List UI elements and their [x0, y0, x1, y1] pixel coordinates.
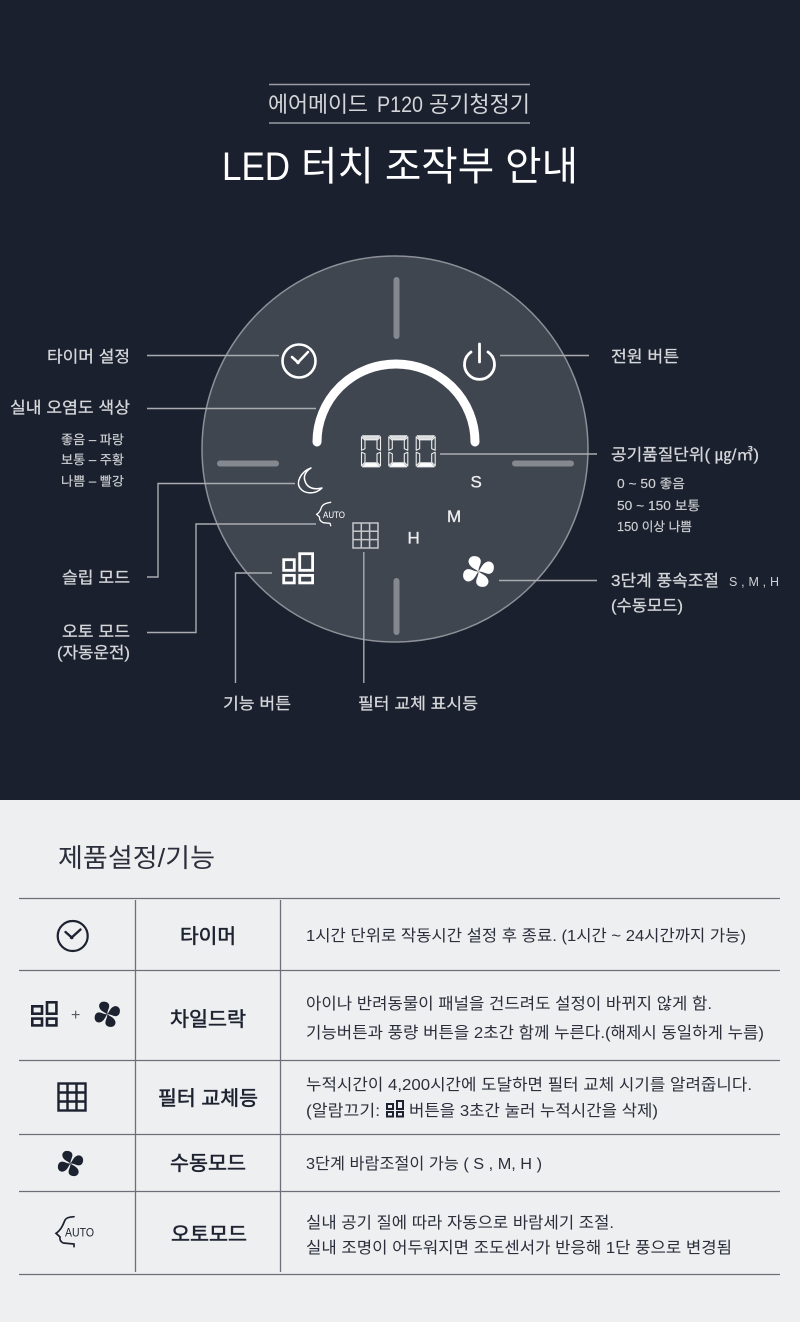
row: timer: 타이머 [180, 925, 236, 948]
text: colour legend: 좋음 – 파랑 [61, 433, 125, 447]
text: colour legend: 나쁨 – 빨강 [61, 474, 125, 488]
icon: function squares [32, 1002, 56, 1025]
icon: sleep moon [298, 468, 322, 493]
row: auto mode [56, 1214, 732, 1257]
text: air quality ranges: 50 ~ 150 보통 [617, 499, 700, 513]
row: auto mode: 실내 조명이 어두워지면 조도센서가 반응해 1단 풍으로 변경됨 [306, 1239, 732, 1257]
title: 터치 조작부 안내 [301, 145, 578, 189]
air quality arc [317, 364, 475, 442]
fan speed letters [408, 472, 482, 548]
icon: fan [93, 1000, 121, 1028]
callout: auto mode: (자동운전) [57, 644, 130, 662]
icon: auto mode [317, 502, 345, 526]
row: manual mode: 수동모드 [170, 1153, 246, 1175]
icon: function squares [284, 554, 313, 583]
tick marks [217, 277, 574, 635]
digit 3 [416, 436, 435, 467]
panel: dark hero background [0, 0, 800, 800]
icon: auto: AUTO [65, 1226, 94, 1240]
row: manual mode [56, 1149, 542, 1178]
row: timer: 1시간 단위로 작동시간 설정 후 종료. (1시간 ~ 24시간까지 가능) [306, 927, 746, 945]
row: child lock: 차일드락 [170, 1008, 246, 1031]
subtitle with rules: P120 [377, 92, 423, 117]
digit 2 [389, 436, 408, 467]
subtitle with rules: 에어메이드 [268, 92, 368, 117]
text: air quality ranges [617, 477, 700, 534]
row: child lock [32, 995, 764, 1042]
row: timer [58, 921, 746, 951]
fan speed letters: H [408, 528, 420, 548]
text: air quality ranges: 150 이상 나쁨 [617, 520, 692, 534]
icon: filter grid [353, 523, 378, 548]
text: colour legend [61, 433, 125, 488]
callout: function button: 기능 버튼 [223, 695, 291, 713]
callout: power button: 전원 버튼 [611, 348, 679, 366]
row: filter: 누적시간이 4,200시간에 도달하면 필터 교체 시기를 알려줍니다. [306, 1076, 752, 1094]
callout: air quality unit: 공기품질단위( ㎍/㎥) [611, 446, 759, 464]
callout: fan speed: S , M , H [729, 575, 779, 589]
table grid [19, 898, 780, 1274]
callout: indoor pollution colour: 실내 오염도 색상 [10, 399, 130, 417]
callout: auto mode [57, 524, 316, 662]
icon: power button [465, 344, 494, 379]
table: functions [19, 898, 780, 1274]
icon: timer clock [282, 344, 316, 378]
digit 1 [362, 436, 380, 467]
panel: light table background [0, 800, 800, 1322]
text: colour legend: 보통 – 주황 [61, 453, 125, 467]
callout: timer: 타이머 설정 [47, 348, 130, 366]
icon: fan [461, 554, 496, 589]
fan speed letters: M [447, 507, 461, 526]
subtitle with rules: 공기청정기 [429, 92, 530, 117]
callout: sleep mode [62, 484, 295, 587]
callout: fan speed [499, 572, 779, 615]
callout: auto mode: 오토 모드 [62, 624, 130, 641]
digital display 000 [362, 436, 435, 467]
heading: product settings: 제품설정/기능 [58, 843, 215, 873]
row: filter: (알람끄기: [306, 1102, 380, 1120]
row: filter: 필터 교체등 [158, 1087, 258, 1110]
callout: fan speed: 3단계 풍속조절 [611, 572, 719, 590]
callout: function button [223, 573, 291, 713]
row: auto mode: 실내 공기 질에 따라 자동으로 바람세기 조절. [306, 1214, 614, 1232]
row: auto mode: 오토모드 [171, 1224, 247, 1246]
icon: filter grid [58, 1084, 86, 1110]
panel: control dial [202, 256, 588, 642]
row: filter: 버튼을 3초간 눌러 누적시간을 삭제) [409, 1102, 658, 1120]
row: child lock: 기능버튼과 풍량 버튼을 2초간 함께 누른다.(해제시 동일하게 누름) [306, 1024, 764, 1042]
icon: inline function squares [387, 1101, 403, 1116]
fan speed letters: S [470, 472, 482, 492]
icon: fan [56, 1149, 85, 1178]
row: child lock: + [71, 1007, 80, 1024]
callout: fan speed: (수동모드) [611, 597, 683, 615]
icon: auto [56, 1217, 94, 1247]
row: child lock: 아이나 반려동물이 패널을 건드려도 설정이 바뀌지 않게 함. [306, 995, 712, 1013]
icon: timer [58, 921, 88, 951]
row: filter [58, 1076, 752, 1120]
title: LED [222, 145, 290, 189]
subtitle with rules [268, 84, 530, 123]
callout: sleep mode: 슬립 모드 [62, 569, 130, 587]
callout: filter indicator: 필터 교체 표시등 [358, 695, 478, 713]
text: air quality ranges: 0 ~ 50 좋음 [617, 477, 685, 491]
row: manual mode: 3단계 바람조절이 가능 ( S , M, H ) [306, 1155, 542, 1173]
icon: auto mode: AUTO [323, 510, 345, 520]
